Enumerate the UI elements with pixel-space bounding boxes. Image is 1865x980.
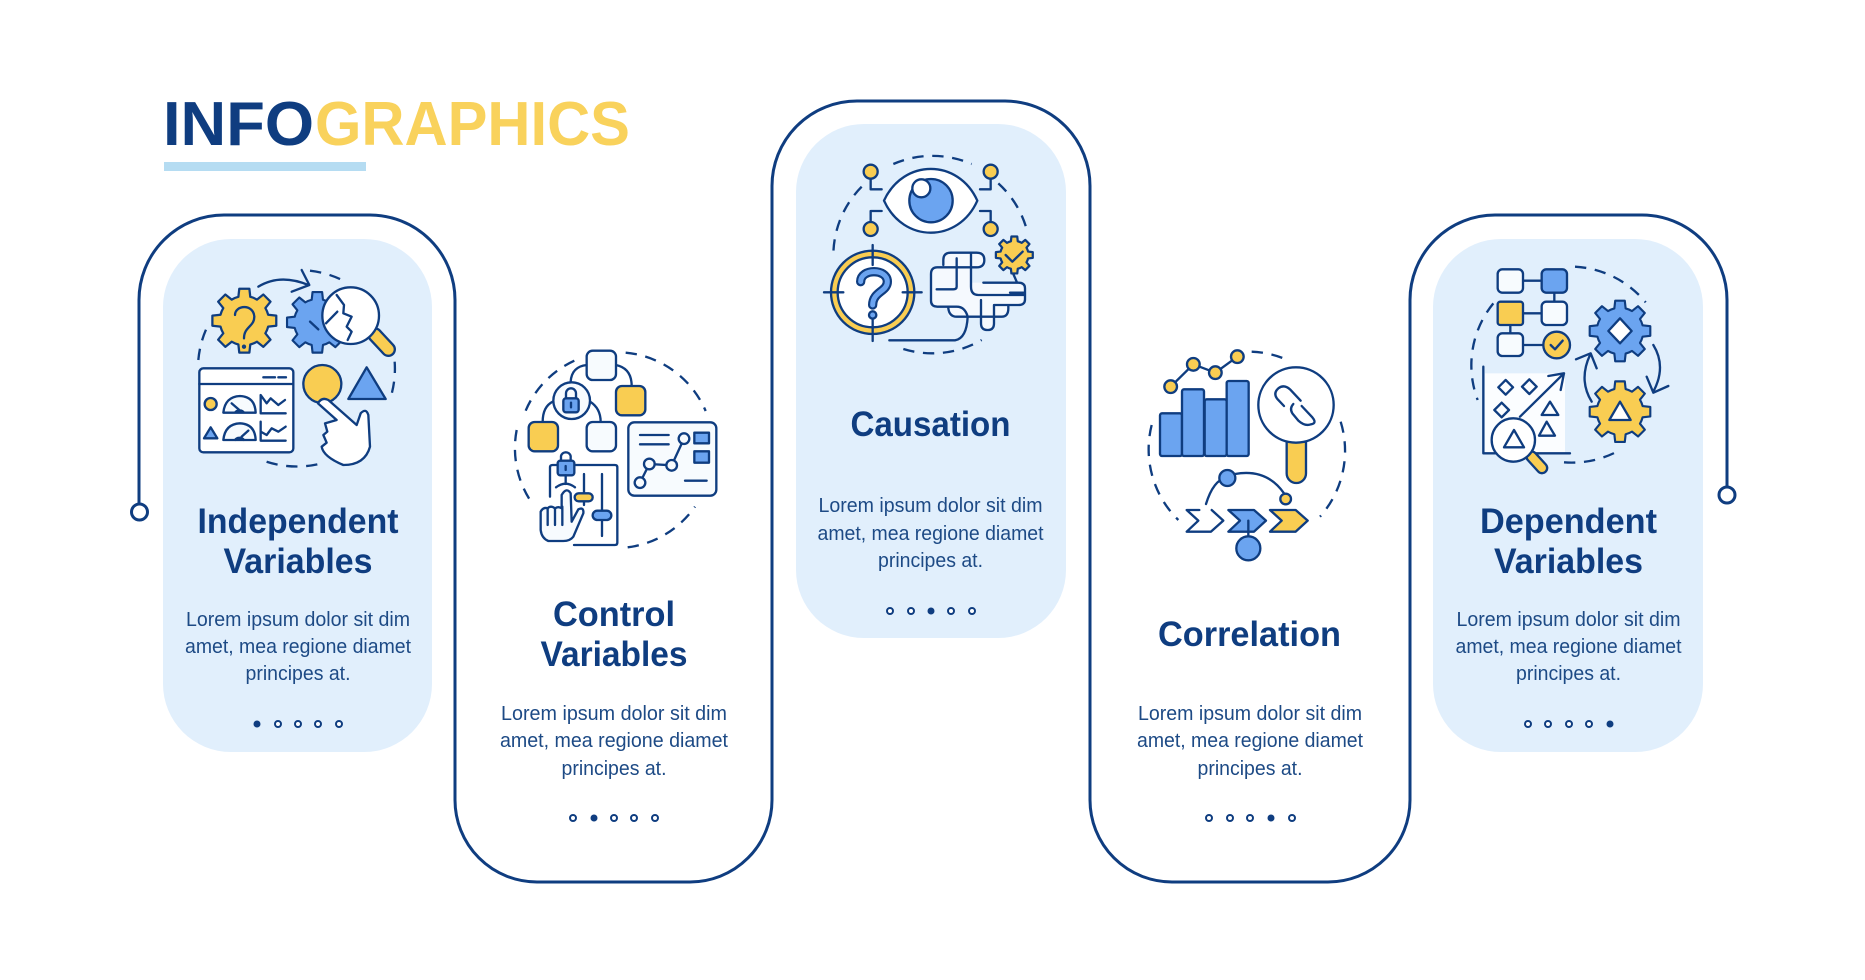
description [1456, 609, 1682, 685]
page dots [1525, 720, 1614, 728]
panel background [163, 239, 432, 752]
heading: Control [553, 595, 675, 634]
heading: Dependent [1480, 502, 1657, 541]
description: Lorem ipsum dolor sit dim [186, 609, 410, 631]
description: amet, mea regione diamet [1137, 730, 1363, 752]
description [818, 495, 1044, 572]
page dots [254, 720, 342, 728]
description: principes at. [878, 550, 983, 572]
heading [198, 502, 399, 581]
description: Lorem ipsum dolor sit dim [1138, 703, 1362, 725]
title [163, 90, 630, 159]
panel: Independent Variables [163, 239, 432, 752]
heading [540, 595, 688, 674]
description: principes at. [1198, 758, 1302, 780]
description [1137, 703, 1363, 780]
panel: Correlation [1137, 350, 1363, 822]
description: amet, mea regione diamet [1456, 636, 1682, 658]
panel: Causation [796, 124, 1066, 638]
panel background [796, 124, 1066, 638]
title: GRAPHICS [315, 90, 630, 159]
heading: Correlation [1158, 615, 1341, 654]
icon: eye, target question, maze, badge [824, 156, 1033, 353]
description: Lorem ipsum dolor sit dim [818, 495, 1042, 517]
title: INFO [163, 90, 314, 159]
heading: Variables [1494, 542, 1643, 581]
description: principes at. [246, 663, 350, 685]
panel: Dependent Variables [1433, 239, 1703, 752]
heading: Variables [540, 635, 688, 674]
heading: Variables [224, 542, 372, 581]
icon: gears, magnifier, dashboard, hand [198, 270, 395, 466]
description [185, 609, 411, 685]
heading: Independent [198, 502, 399, 541]
icon: flow nodes, locks, chart, hand on sliders [515, 351, 716, 547]
title underline [164, 162, 366, 171]
page dots [887, 608, 975, 614]
icon: flow grid, gears, scatter chart, magnifier [1471, 267, 1668, 468]
description: principes at. [1516, 663, 1621, 685]
panel: Control Variables [500, 351, 728, 822]
heading [1480, 502, 1657, 581]
icon: bars, link magnifier, chevrons [1149, 350, 1345, 560]
panel background [1433, 239, 1703, 752]
page dots [570, 814, 658, 822]
description: amet, mea regione diamet [185, 636, 411, 658]
description: Lorem ipsum dolor sit dim [501, 703, 727, 725]
description: amet, mea regione diamet [500, 730, 728, 752]
heading: Causation [850, 405, 1010, 444]
continuous frame outline [132, 101, 1735, 882]
description: principes at. [562, 758, 666, 780]
page dots [1206, 814, 1295, 822]
description: Lorem ipsum dolor sit dim [1456, 609, 1680, 631]
description [500, 703, 728, 780]
description: amet, mea regione diamet [818, 523, 1044, 545]
